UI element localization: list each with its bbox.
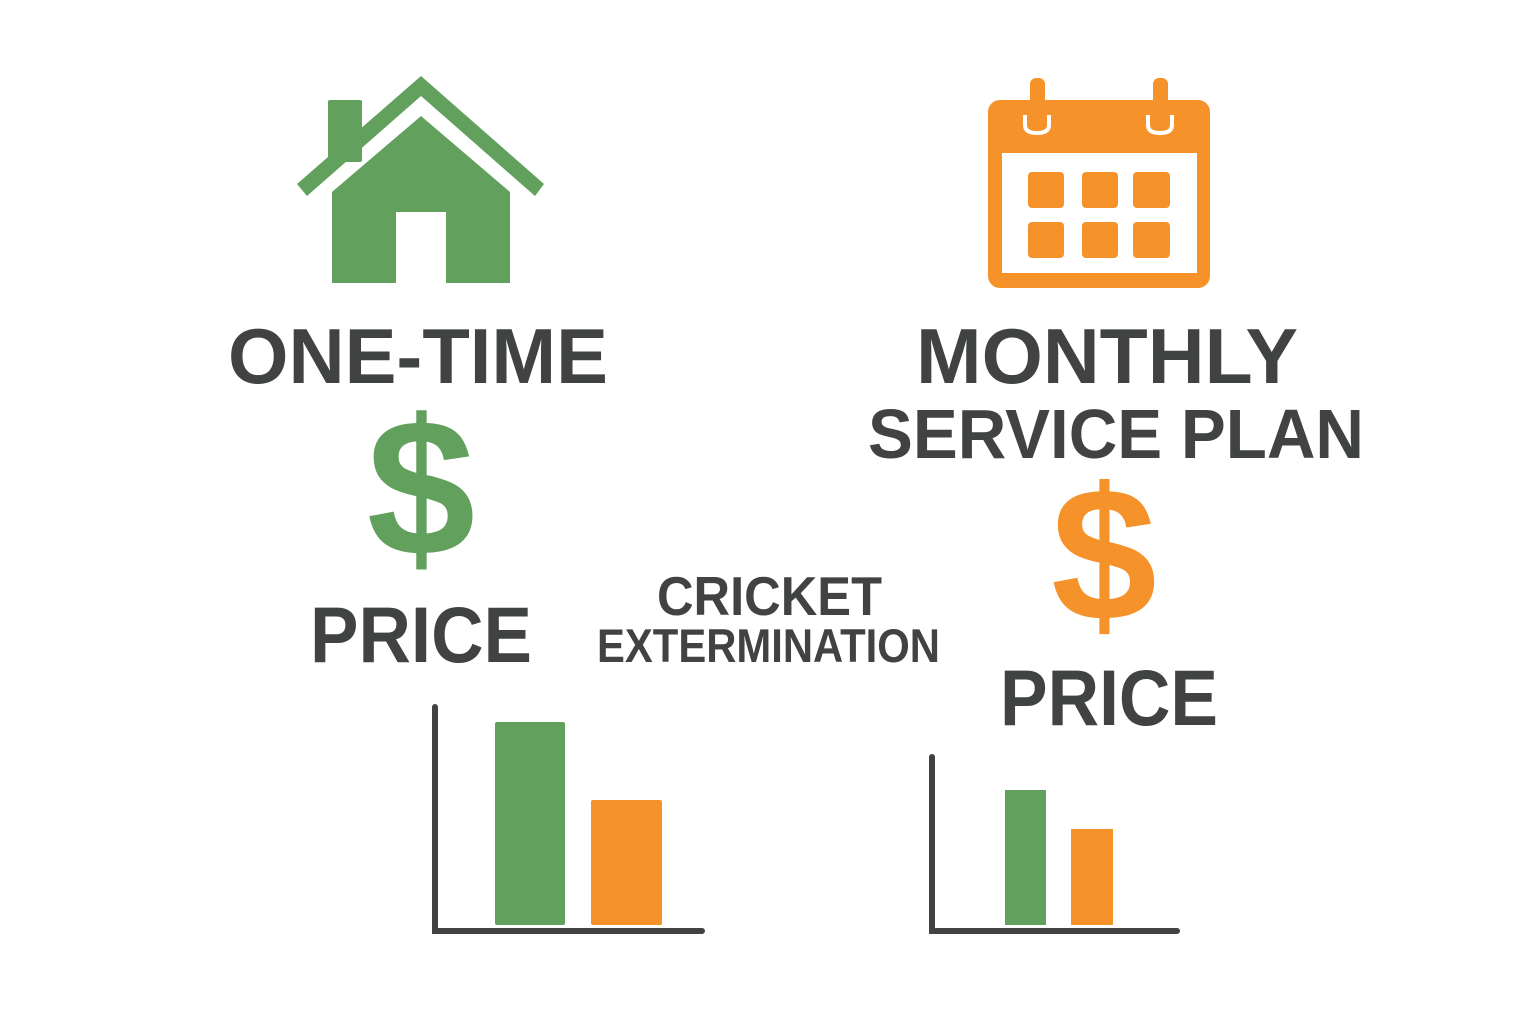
icon: green dollar: $ [367, 379, 475, 597]
icon: orange dollar: $ [1051, 449, 1157, 661]
bar chart right [932, 757, 1177, 931]
heading: monthly service plan [868, 312, 1364, 473]
bar chart left [435, 707, 702, 931]
label: price right: PRICE [1000, 653, 1218, 742]
icon: calendar [988, 78, 1210, 288]
heading: monthly service plan: SERVICE PLAN [868, 395, 1364, 473]
label: price left: PRICE [310, 590, 532, 679]
title: cricket extermination: CRICKET [657, 565, 882, 627]
title: cricket extermination [597, 565, 940, 672]
heading: one-time: ONE-TIME [228, 312, 608, 400]
heading: monthly service plan: MONTHLY [916, 312, 1298, 400]
icon: house [297, 76, 544, 283]
title: cricket extermination: EXTERMINATION [597, 619, 940, 672]
